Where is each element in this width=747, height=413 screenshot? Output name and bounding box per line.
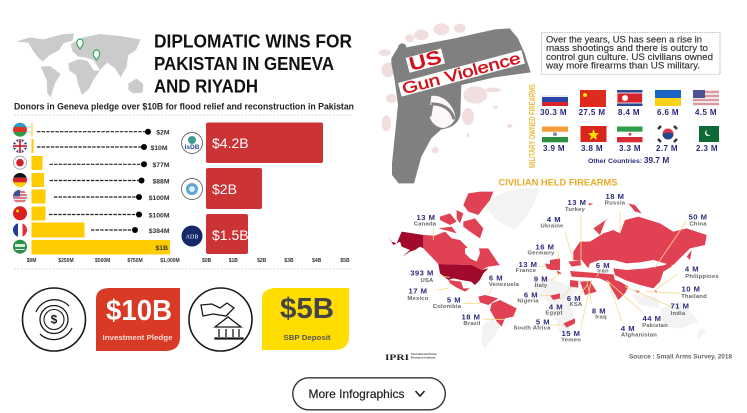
flag grid: military firearms: 4.5 M — [695, 108, 717, 117]
country value labels: 6 M — [596, 261, 610, 270]
country value labels: 10 M — [682, 284, 700, 294]
country value labels: 71 M — [671, 302, 689, 310]
country value labels: Nigeria — [517, 298, 539, 304]
flag grid: military firearms: 30.3 M — [540, 108, 567, 117]
callout: intro text: control gun culture. US civilians owned — [546, 52, 713, 62]
country value labels: 4 M — [547, 215, 561, 224]
bar chart: donor pledges: $750M — [127, 258, 143, 264]
bar chart: donor pledges: $10M — [150, 145, 168, 152]
country value labels: Afghanistan — [621, 332, 657, 338]
callout: intro text: mass shootings and there is outcry to — [546, 43, 708, 53]
bar chart: donor pledges: $1,000M — [160, 258, 180, 264]
IPRI logo — [385, 352, 437, 362]
stat card: $10B investment pledge: $10B — [106, 295, 172, 327]
bar chart: donor pledges — [27, 122, 180, 264]
flag grid: military firearms: 3.9 M — [543, 144, 565, 153]
country value labels: Russia — [605, 200, 626, 206]
flag grid: military firearms: 3.3 M — [619, 144, 641, 153]
country value labels: 16 M — [536, 242, 554, 252]
title: DIPLOMATIC WINS FOR — [154, 32, 352, 52]
country value labels: Mexico — [407, 296, 429, 302]
bar chart: institutional pledges: IsDB — [185, 144, 200, 151]
bar chart: institutional pledges: ADB — [186, 234, 198, 240]
Hudson Bay cut-out — [465, 245, 480, 262]
country value labels: 50 M — [689, 212, 707, 222]
axis title: military owned firearms: MILITARY OWNED FIREARMS — [528, 84, 537, 168]
bar chart: institutional pledges: $2B — [212, 181, 237, 197]
country value labels: China — [689, 222, 707, 228]
bar chart: donor pledges: $100M — [149, 195, 170, 202]
country value labels: Iraq — [595, 314, 607, 320]
callout: intro text: Over the years, US has seen a rise in — [546, 34, 702, 44]
donor country flags — [13, 122, 28, 254]
country value labels: 6 M — [524, 290, 538, 300]
bar chart: donor pledges: $77M — [152, 162, 170, 169]
subtitle: Donors in Geneva pledge over $10B for flood relief and reconstruction in Pakistan — [14, 102, 354, 112]
bar chart: institutional pledges: $4.2B — [212, 135, 249, 151]
bar chart: donor pledges: $2M — [156, 130, 170, 136]
country value labels: Thailand — [681, 294, 707, 300]
source note: Source : Small Arms Survey, 2018 — [629, 354, 732, 360]
country value labels: Canada — [414, 222, 437, 228]
country value labels: 4 M — [621, 324, 635, 333]
bar chart: institutional pledges: $4B — [312, 258, 322, 264]
flag grid: military firearms: 6.6 M — [657, 108, 679, 117]
country value labels — [407, 192, 719, 344]
IPRI logo: International Policy — [411, 352, 437, 356]
bar chart: institutional pledges: $3B — [284, 258, 294, 264]
country value labels: 17 M — [409, 286, 427, 296]
gun violence title: US — [407, 47, 444, 76]
country value labels: 5 M — [536, 318, 550, 326]
country value labels: 4 M — [685, 264, 699, 274]
icon: hand depositing money in bank — [189, 288, 252, 351]
country value labels: Pakistan — [642, 323, 668, 329]
bar chart: donor pledges: $100M — [149, 212, 170, 220]
bar chart: institutional pledges: $5B — [340, 258, 350, 264]
country value labels: 4 M — [549, 302, 563, 312]
stat card: $10B investment pledge: Investment Pledge — [102, 335, 173, 342]
country value labels: USA — [420, 278, 434, 284]
bar chart: donor pledges: $384M — [149, 228, 170, 235]
heading: civilian held firearms: CIVILIAN HELD FIREARMS — [498, 178, 618, 188]
country value labels: 6 M — [567, 294, 581, 303]
country value labels: South Africa — [513, 326, 551, 332]
bar chart: institutional pledges: $1.5B — [212, 227, 249, 243]
bar chart: donor pledges: $500M — [95, 258, 110, 264]
country value labels: Iran — [597, 268, 609, 274]
world map with location pins — [16, 33, 143, 97]
map: civilian held firearms — [388, 188, 719, 348]
country value labels: France — [516, 268, 537, 274]
country value labels: Philippines — [685, 274, 719, 280]
country value labels: 18 M — [462, 312, 480, 322]
country value labels: 6 M — [489, 274, 503, 282]
country value labels: India — [671, 311, 686, 317]
country value labels: Turkey — [565, 207, 586, 213]
country value labels: Ukraine — [540, 224, 564, 230]
stat card: $5B SBP deposit: $5B — [280, 293, 334, 325]
highlighted USA and Alaska — [388, 232, 488, 285]
title — [154, 32, 352, 96]
blood splash background — [379, 23, 512, 153]
highlighted countries: Eurasia and Africa — [550, 203, 707, 328]
highlighted countries: Americas — [423, 192, 560, 327]
IPRI logo: Research Institute — [411, 356, 436, 360]
button: more infographics: More Infographics — [308, 387, 404, 401]
bar chart: donor pledges: $1B — [156, 245, 168, 252]
panel: US gun violence — [379, 23, 732, 362]
panel: Pakistan diplomatic wins — [13, 32, 354, 351]
country value labels: Venezuela — [489, 282, 520, 288]
country value labels: 9 M — [534, 274, 548, 284]
icon: circular dollar flow — [22, 288, 86, 351]
country value labels: 44 M — [643, 314, 661, 323]
bar chart: institutional pledges: $1B — [229, 258, 238, 264]
country value labels: 13 M — [568, 198, 586, 207]
stat card: $10B investment pledge — [96, 288, 180, 351]
flag grid: military firearms: 3.8 M — [581, 144, 603, 153]
flag grid: military firearms — [540, 90, 719, 165]
country value labels: 8 M — [592, 306, 606, 316]
button: more infographics — [293, 378, 445, 410]
country value labels: KSA — [569, 302, 583, 308]
bar chart: donor pledges: $88M — [152, 178, 170, 186]
country value labels: Egypt — [545, 310, 563, 316]
country value labels: Yemen — [561, 338, 581, 344]
callout: intro text — [542, 33, 720, 74]
title: PAKISTAN IN GENEVA — [154, 54, 334, 74]
country value labels: 18 M — [606, 192, 624, 201]
flag grid: military firearms: 27.5 M — [579, 108, 605, 117]
icon: circular dollar flow: $ — [51, 312, 58, 326]
bar chart: institutional pledges — [182, 122, 350, 264]
leader lines — [433, 212, 687, 328]
light continents — [481, 188, 707, 348]
country value labels: 13 M — [417, 213, 435, 222]
callout: intro text: way more firearms than US military. — [545, 61, 700, 71]
country value labels: Germany — [528, 250, 555, 256]
gun violence title — [398, 47, 526, 99]
title: AND RIYADH — [154, 76, 258, 96]
flag grid: military firearms: 2.3 M — [696, 144, 718, 153]
IPRI logo: IPRI — [385, 352, 410, 362]
flag grid: military firearms: 2.7 M — [656, 144, 678, 153]
stat card: $5B SBP deposit — [262, 288, 349, 350]
country value labels: Brazil — [463, 321, 481, 327]
country value labels: 13 M — [519, 260, 537, 269]
country value labels: 393 M — [410, 268, 434, 278]
gun violence title: Gun Violence — [401, 50, 523, 98]
stat card: $5B SBP deposit: SBP Deposit — [284, 335, 331, 342]
bar chart: institutional pledges: $2B — [257, 258, 267, 264]
icon: pistol silhouette — [391, 28, 531, 183]
country value labels: 15 M — [562, 329, 580, 338]
country value labels: Colombia — [433, 304, 462, 310]
country value labels: Italy — [535, 283, 548, 289]
flag grid: military firearms: 8.4 M — [618, 108, 640, 117]
flag grid: military firearms: Other Countries: 39.7 M — [588, 155, 669, 165]
bar chart: institutional pledges: $0B — [202, 258, 212, 264]
bar chart: donor pledges: $250M — [58, 258, 74, 264]
bar chart: donor pledges: $0M — [27, 258, 36, 264]
country value labels: 5 M — [447, 296, 461, 304]
